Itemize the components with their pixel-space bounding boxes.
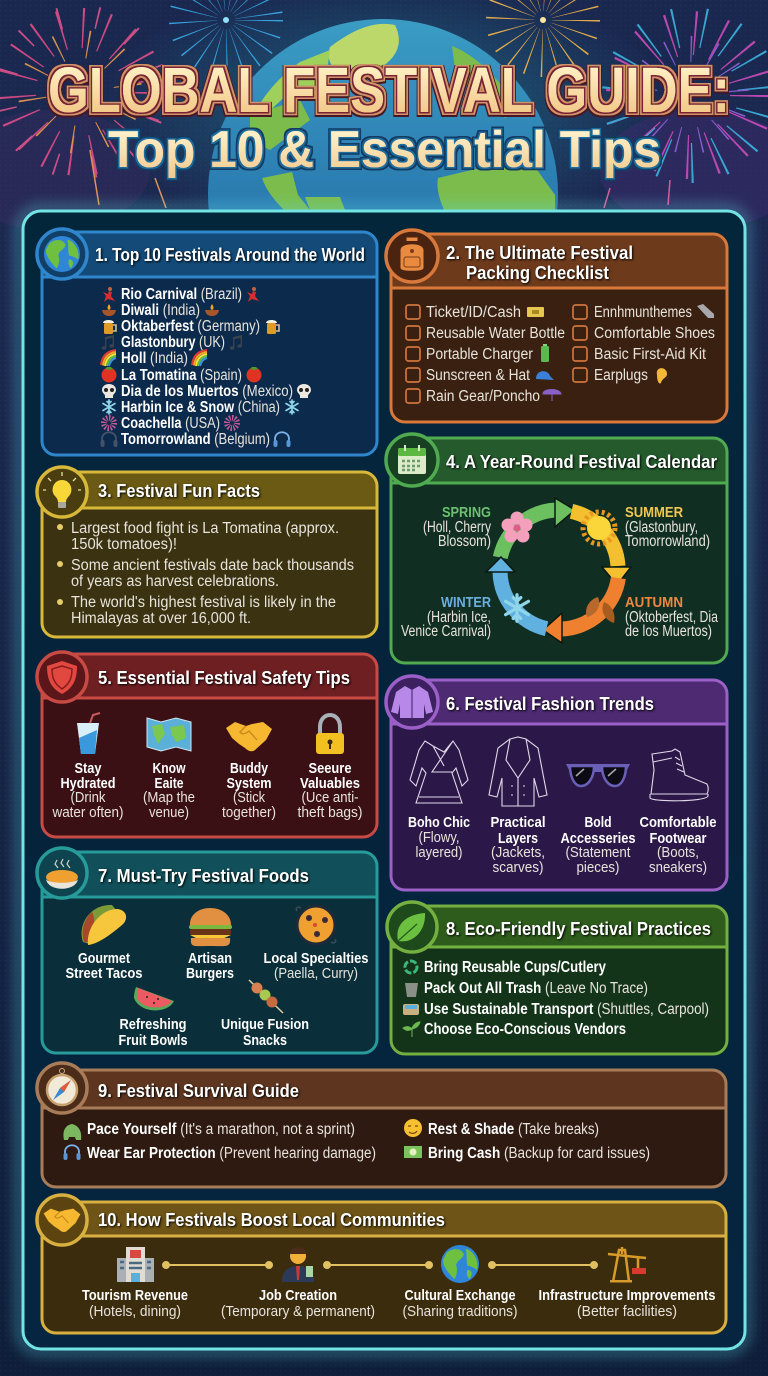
season label: winter: (Harbin Ice,	[427, 609, 491, 626]
tip: secure valuables: Valuables	[300, 775, 360, 792]
item: cultural exchange: Cultural Exchange	[404, 1287, 516, 1304]
festival list: Harbin Ice & Snow (China)	[121, 399, 280, 416]
tip: buddy system: together)	[222, 804, 276, 821]
panel 6: fashion	[386, 676, 727, 890]
icon: globe	[37, 229, 87, 279]
tip: stay hydrated	[52, 713, 124, 821]
heading	[446, 243, 633, 283]
globe	[208, 19, 558, 210]
heading: 7. Must-Try Festival Foods	[98, 866, 309, 886]
title line 2: Top 10 & Essential Tips	[108, 121, 661, 179]
checklist left column	[406, 304, 565, 405]
trend: bold accessories: (Statement	[566, 844, 631, 861]
food: fruit bowls	[118, 987, 188, 1049]
item: infrastructure: Infrastructure Improvements	[538, 1287, 716, 1304]
fact 2	[57, 557, 354, 590]
fireworks: purple right	[604, 27, 758, 208]
icon: blossom	[502, 512, 532, 542]
checklist right column: Earplugs	[594, 367, 648, 384]
food: paella: (Paella, Curry)	[274, 965, 358, 982]
panel 9: survival guide	[37, 1063, 726, 1187]
season label: spring	[423, 504, 491, 550]
trend: boho chic: Boho Chic	[408, 814, 470, 831]
heading: Packing Checklist	[466, 263, 609, 283]
season label: winter	[401, 594, 491, 640]
icon: shield	[37, 652, 87, 702]
practice 4: Choose Eco-Conscious Vendors	[424, 1021, 626, 1038]
heading: 2. The Ultimate Festival	[446, 243, 633, 263]
practice 2: Pack Out All Trash (Leave No Trace)	[424, 980, 648, 997]
fact 2: of years as harvest celebrations.	[71, 573, 279, 590]
fact 2: Some ancient festivals date back thousands	[71, 557, 354, 574]
tip: bring cash: Bring Cash (Backup for card issues)	[428, 1145, 650, 1162]
checklist right column: Ennhmunthemes	[594, 304, 692, 321]
fact 3: The world's highest festival is likely in the	[71, 594, 336, 611]
festival list: Coachella (USA)	[121, 415, 220, 432]
panel 1: top 10 festivals	[37, 229, 377, 455]
food: tacos: Gourmet	[78, 950, 130, 967]
checklist left column: Rain Gear/Poncho	[426, 388, 540, 405]
tip: secure valuables: theft bags)	[298, 804, 362, 821]
heading: 9. Festival Survival Guide	[98, 1081, 299, 1101]
icon: light bulb	[37, 467, 87, 517]
panel 2: packing checklist	[386, 230, 727, 422]
food: paella: Local Specialties	[264, 950, 368, 967]
trend: boho chic: layered)	[416, 844, 462, 861]
season label: spring: SPRING	[442, 504, 491, 521]
festival list: Oktaberfest (Germany)	[121, 318, 260, 335]
food: fusion snacks: Unique Fusion	[221, 1016, 309, 1033]
season label: summer: SUMMER	[625, 504, 683, 521]
practice 3: Use Sustainable Transport (Shuttles, Carpool)	[424, 1001, 709, 1018]
festival list: Tomorrowland (Belgium)	[121, 431, 270, 448]
season label: autumn: (Oktoberfest, Dia	[625, 609, 718, 626]
tip: buddy system: System	[226, 775, 272, 792]
trend: comfortable footwear	[640, 749, 716, 876]
festival list	[121, 286, 293, 448]
festival list: Glastonbury (UK)	[121, 334, 225, 351]
tip: buddy system	[222, 722, 276, 821]
food: fruit bowls: Refreshing	[120, 1016, 186, 1033]
food: burgers: Artisan	[188, 950, 232, 967]
trend: practical layers: scarves)	[492, 859, 544, 876]
checklist right column	[573, 304, 715, 384]
season label: autumn: de los Muertos)	[625, 623, 712, 640]
icon: compass	[37, 1063, 87, 1113]
season label: autumn	[625, 594, 718, 640]
seasonal cycle	[486, 498, 631, 643]
festival list: Rio Carnival (Brazil)	[121, 286, 242, 303]
food: fruit bowls: Fruit Bowls	[118, 1032, 188, 1049]
panel 3: fun facts	[37, 467, 377, 637]
tip: know exits: (Map the	[143, 789, 195, 806]
food: fusion snacks: Snacks	[243, 1032, 287, 1049]
trend: boho chic: (Flowy,	[418, 829, 460, 846]
tip: stay hydrated: Hydrated	[60, 775, 116, 792]
season label: winter: WINTER	[441, 594, 491, 611]
festival list: Holl (India)	[121, 350, 188, 367]
item: job creation: (Temporary & permanent)	[221, 1303, 375, 1320]
panel 5: safety tips	[37, 652, 377, 837]
icon: steaming bowl	[37, 848, 87, 898]
item: infrastructure	[538, 1247, 716, 1320]
trend: practical layers: Practical	[490, 814, 546, 831]
tip: stay hydrated: water often)	[52, 804, 124, 821]
icon: jacket	[386, 676, 438, 728]
checklist right column: Basic First-Aid Kit	[594, 346, 707, 363]
item: cultural exchange: (Sharing traditions)	[402, 1303, 518, 1320]
item: job creation	[221, 1247, 375, 1320]
season label: winter: Venice Carnival)	[401, 623, 491, 640]
heading: 10. How Festivals Boost Local Communities	[98, 1210, 445, 1230]
trend: bold accessories: pieces)	[576, 859, 620, 876]
panel 7: foods	[37, 848, 377, 1053]
food: paella	[264, 906, 368, 982]
checklist right column: Comfortable Shoes	[594, 325, 715, 342]
tip: know exits: Eaite	[154, 775, 184, 792]
tip: rest and shade: Rest & Shade (Take breaks)	[428, 1121, 599, 1138]
food: tacos	[66, 905, 142, 982]
fireworks: gold	[510, 0, 576, 53]
checklist left column: Portable Charger	[426, 346, 533, 363]
fact 3: Himalayas at over 16,000 ft.	[71, 610, 251, 627]
icon: autumn leaves	[586, 597, 615, 623]
season label: summer: Tomorrowland)	[625, 533, 710, 550]
checklist left column: Ticket/ID/Cash	[426, 304, 521, 321]
tip: stay hydrated: Stay	[74, 760, 102, 777]
panel 8: eco practices	[387, 902, 727, 1054]
item: cultural exchange	[402, 1245, 518, 1320]
panel 10: local communities	[37, 1195, 726, 1333]
season label: summer	[625, 504, 710, 550]
heading: 5. Essential Festival Safety Tips	[98, 668, 350, 688]
fact 1	[57, 520, 339, 553]
food: burgers	[186, 908, 234, 982]
fact 3	[57, 594, 336, 627]
trend: bold accessories: Accesseries	[560, 830, 636, 847]
fireworks: pink left	[4, 16, 166, 208]
heading: 4. A Year-Round Festival Calendar	[446, 452, 717, 472]
tip: know exits: Know	[152, 760, 186, 777]
season label: autumn: AUTUMN	[625, 594, 683, 611]
trend: comfortable footwear: Footwear	[650, 830, 707, 847]
festival list: La Tomatina (Spain)	[121, 367, 242, 384]
tip: know exits: venue)	[149, 804, 189, 821]
food: fusion snacks	[221, 980, 309, 1049]
tip: ear protection: Wear Ear Protection (Prevent hearing damage)	[87, 1145, 376, 1162]
season label: spring: (Holl, Cherry	[423, 519, 491, 536]
fact 1: Largest food fight is La Tomatina (approx.	[71, 520, 339, 537]
trend: practical layers: (Jackets,	[491, 844, 545, 861]
trend: practical layers: Layers	[498, 830, 538, 847]
trend: comfortable footwear: (Boots,	[657, 844, 699, 861]
icon: snowflake	[506, 595, 528, 621]
icon: calendar	[386, 434, 438, 486]
panel 4: calendar	[386, 434, 727, 663]
icon: handshake	[37, 1195, 87, 1245]
trend: comfortable footwear: Comfortable	[640, 814, 716, 831]
tip: buddy system: (Stick	[233, 789, 265, 806]
tip: secure valuables: (Uce anti-	[302, 789, 358, 806]
heading: 3. Festival Fun Facts	[98, 481, 260, 501]
trend: comfortable footwear: sneakers)	[649, 859, 707, 876]
trend: bold accessories: Bold	[584, 814, 612, 831]
heading: 1. Top 10 Festivals Around the World	[95, 245, 365, 265]
checklist left column: Reusable Water Bottle	[426, 325, 565, 342]
fireworks: blue	[193, 0, 259, 53]
connectors	[162, 1262, 598, 1268]
item: job creation: Job Creation	[259, 1287, 337, 1304]
food: tacos: Street Tacos	[66, 965, 142, 982]
season label: spring: Blossom)	[438, 533, 491, 550]
tip: pace yourself: Pace Yourself (It's a marathon, not a sprint)	[87, 1121, 355, 1138]
tip: know exits	[143, 718, 195, 821]
festival list: Diwali (India)	[121, 302, 200, 319]
heading: 8. Eco-Friendly Festival Practices	[446, 919, 711, 939]
item: tourism revenue: (Hotels, dining)	[89, 1303, 181, 1320]
practice 1: Bring Reusable Cups/Cutlery	[424, 959, 606, 976]
checklist left column: Sunscreen & Hat	[426, 367, 531, 384]
tip: secure valuables	[298, 715, 362, 821]
trend: bold accessories	[560, 764, 636, 876]
season label: summer: (Glastonbury,	[625, 519, 698, 536]
tip: stay hydrated: (Drink	[70, 789, 106, 806]
trend: boho chic	[408, 741, 470, 861]
icon: leaf	[387, 902, 437, 952]
food: burgers: Burgers	[186, 965, 234, 982]
icon: backpack	[386, 230, 438, 282]
tip: buddy system: Buddy	[230, 760, 269, 777]
trend: practical layers	[489, 737, 547, 876]
tip: secure valuables: Seeure	[308, 760, 352, 777]
heading: 6. Festival Fashion Trends	[446, 694, 654, 714]
item: infrastructure: (Better facilities)	[577, 1303, 677, 1320]
item: tourism revenue	[82, 1247, 188, 1320]
fact 1: 150k tomatoes)!	[71, 536, 177, 553]
icon: sun	[583, 512, 615, 544]
festival list: Dia de los Muertos (Mexico)	[121, 383, 293, 400]
main frame	[20, 209, 746, 1351]
item: tourism revenue: Tourism Revenue	[82, 1287, 188, 1304]
festival emoji icons	[100, 287, 311, 447]
